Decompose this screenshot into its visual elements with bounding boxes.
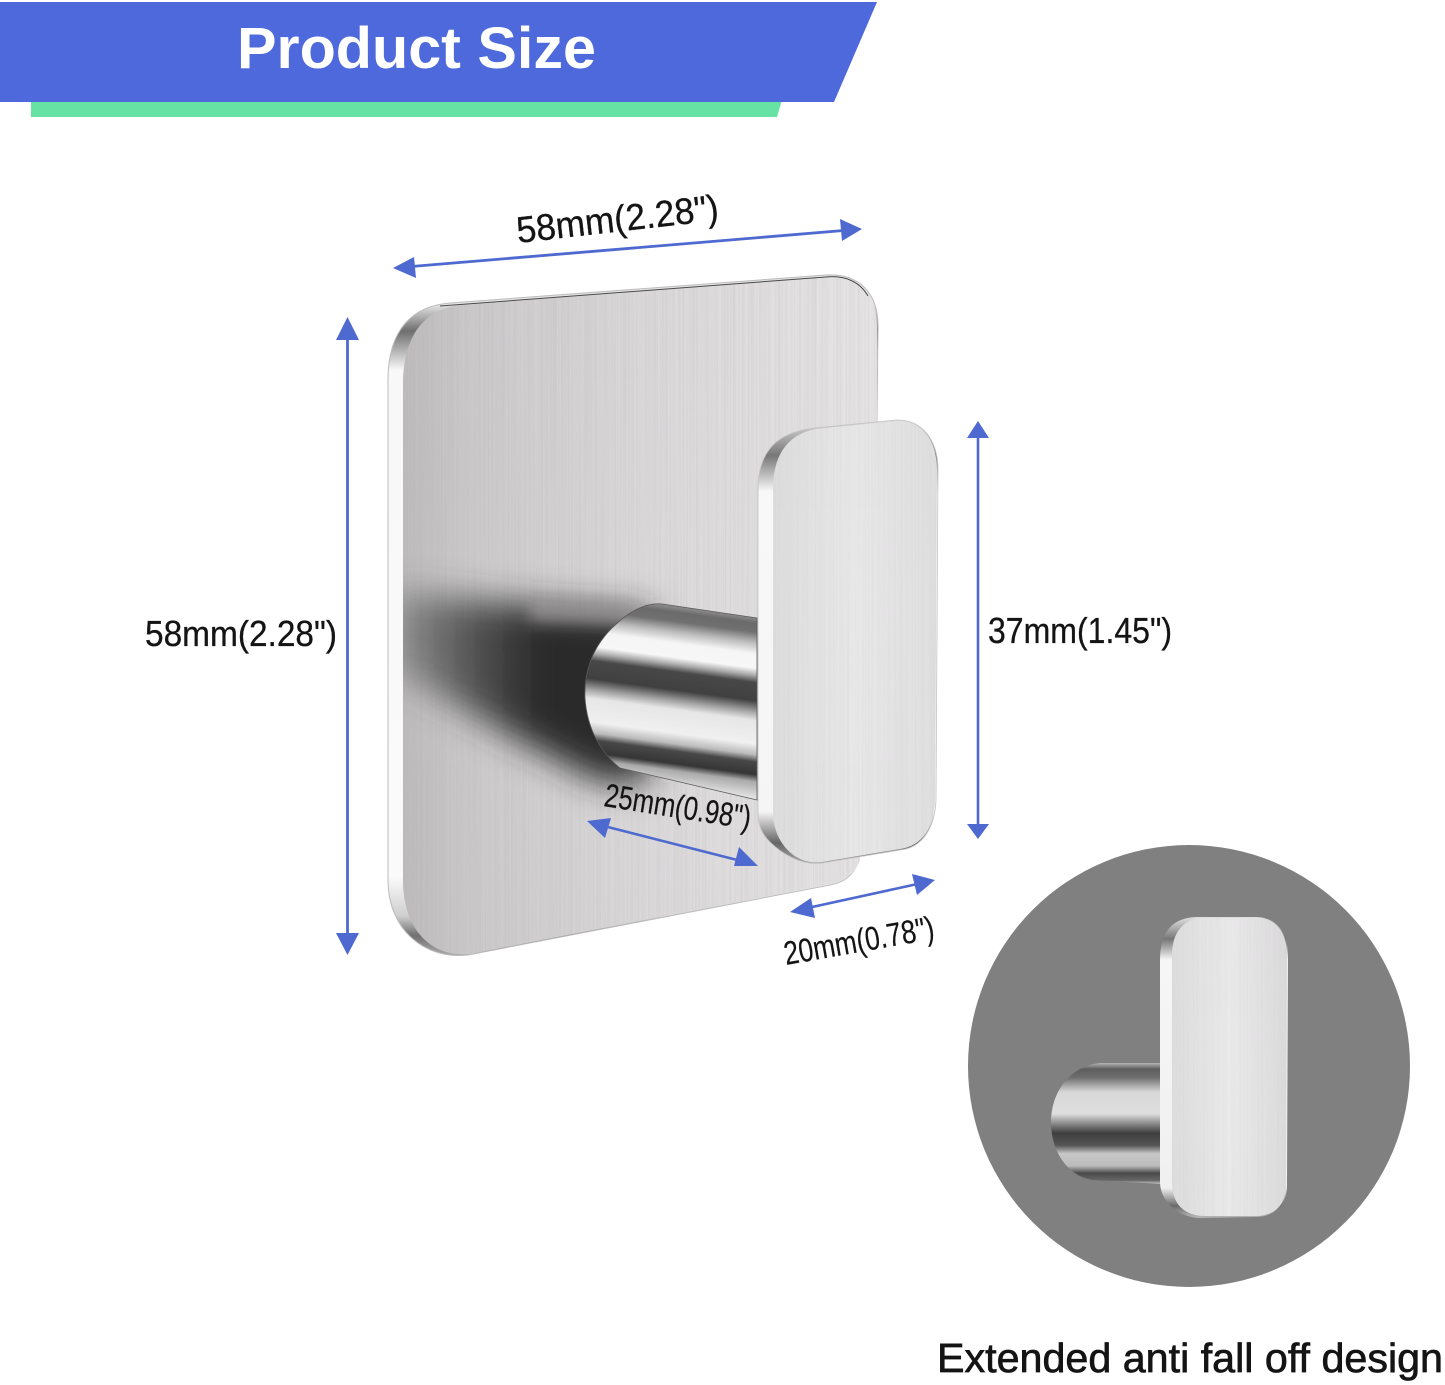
label: post length: 25mm(0.98") [602, 776, 754, 836]
arrow: plate width [393, 219, 862, 278]
label: plate height: 58mm(2.28") [145, 613, 337, 654]
cast shadow [395, 592, 650, 782]
title: Product Size [237, 16, 596, 81]
hook head bevel [758, 420, 938, 863]
dimension: hook height [967, 421, 1172, 839]
blue title band [0, 2, 877, 102]
main product: adhesive hook [388, 270, 940, 960]
label: head depth: 20mm(0.78") [781, 909, 937, 972]
dimension: top width [393, 187, 862, 278]
dimension: plate height [145, 317, 359, 955]
side view inset [968, 845, 1410, 1287]
side view head face [1170, 915, 1290, 1220]
header banner [0, 2, 877, 117]
arrow: plate height [336, 317, 359, 955]
plate top edge line [440, 277, 868, 306]
back plate bevel [388, 275, 878, 956]
grey circle [968, 845, 1410, 1287]
arrow: post length [587, 818, 758, 866]
arrow: hook height [967, 421, 989, 839]
dimension: post length [587, 776, 758, 866]
side view head bevel [1160, 917, 1288, 1218]
cylinder post [585, 604, 757, 800]
hook head face [770, 418, 940, 868]
label: hook height: 37mm(1.45") [988, 610, 1172, 651]
label: plate width: 58mm(2.28") [514, 187, 721, 251]
side view post [1051, 1063, 1162, 1184]
caption: Extended anti fall off design [937, 1335, 1443, 1381]
arrow: head depth [790, 874, 935, 918]
green accent strip [31, 100, 782, 117]
back plate brushed face [395, 270, 885, 960]
dimension: head depth [781, 874, 937, 972]
